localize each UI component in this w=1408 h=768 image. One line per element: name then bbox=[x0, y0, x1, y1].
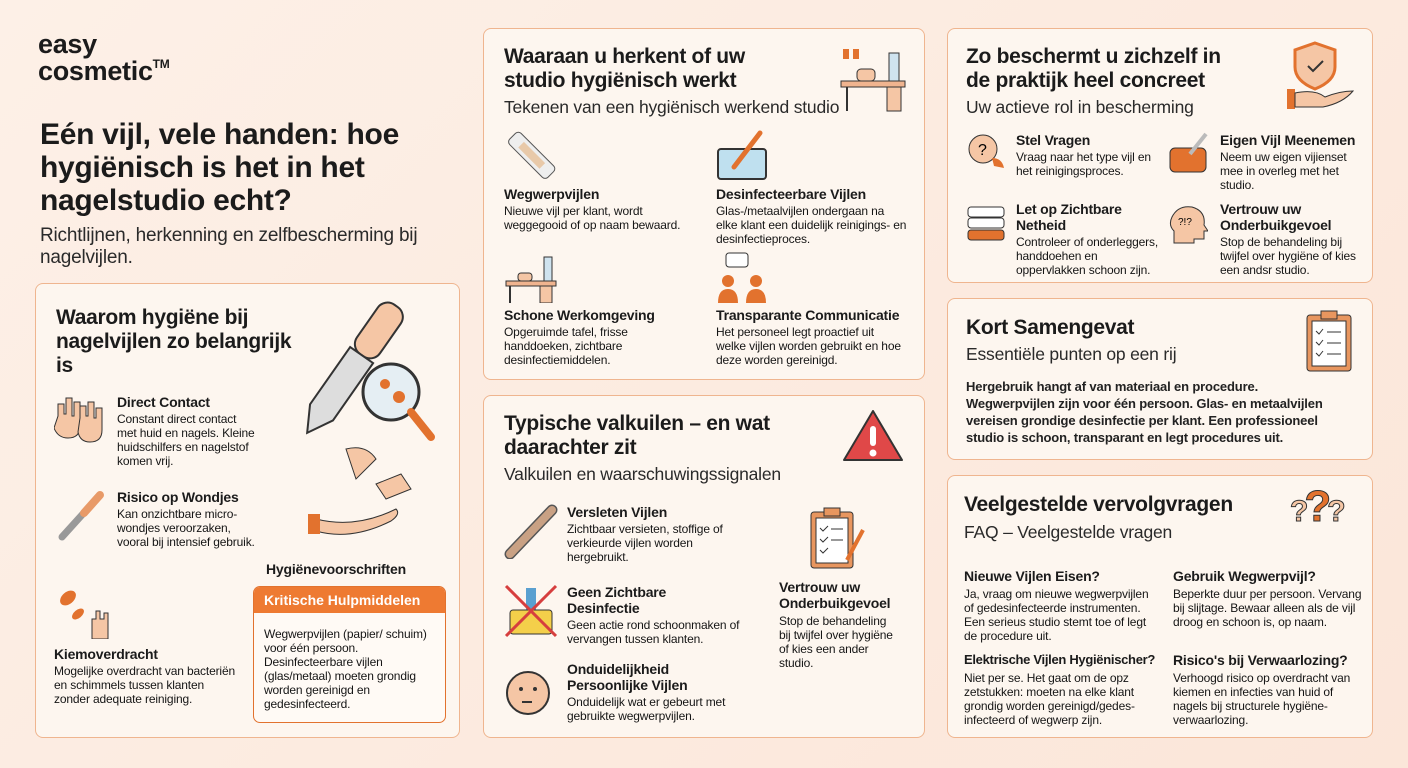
subheading: FAQ – Veelgestelde vragen bbox=[964, 522, 1172, 542]
item: direct contact bbox=[54, 394, 255, 468]
logo bbox=[38, 29, 169, 86]
panel: valkuilen bbox=[483, 395, 925, 738]
faq: gebruik wegwerpvijl: Beperkte duur per persoon. Vervang bij slijtage. Bewaar alleen als de vijl droog en schoon is, op naam. bbox=[1173, 587, 1361, 629]
item: vertrouw onderbuikgevoel: ?!? bbox=[1178, 217, 1192, 228]
faq: elektrische vijlen bbox=[964, 652, 1155, 727]
heading: hygienevoorschriften: Hygiënevoorschriften bbox=[266, 561, 406, 577]
item: desinfecteerbare vijlen: Glas-/metaalvijlen ondergaan na elke klant een duidelijk reinigings- en desinfectieproces. bbox=[716, 204, 906, 246]
logo: cosmeticTM bbox=[38, 56, 169, 86]
icon: desk bbox=[840, 49, 906, 112]
item: stel vragen: ? bbox=[978, 142, 987, 159]
item: vertrouw onderbuikgevoel bbox=[1170, 201, 1356, 277]
item: kiemoverdracht bbox=[54, 590, 235, 706]
icon: warning bbox=[843, 410, 903, 461]
item: onduidelijkheid: Onduidelijk wat er gebeurt met gebruikte wegwerpvijlen. bbox=[567, 695, 725, 723]
item: wegwerpvijlen: Nieuwe vijl per klant, wordt weggegooid of op naam bewaard. bbox=[504, 204, 680, 232]
item: desinfecteerbare vijlen bbox=[716, 130, 906, 246]
item: vertrouw onderbuikgevoel: Vertrouw uw Onderbuikgevoel bbox=[1220, 201, 1331, 233]
icon: shield hand bbox=[1287, 41, 1354, 109]
faq: nieuwe vijlen: Nieuwe Vijlen Eisen? bbox=[964, 568, 1100, 584]
icon: clipboard bbox=[1306, 310, 1352, 372]
item: let op zichtbare netheid: Let op Zichtbare Netheid bbox=[1016, 201, 1122, 233]
faq: elektrische vijlen: Niet per se. Het gaat om de opz zetstukken: moeten na elke klant grondig worden gereinigd/gedes-infecteerd of wegwerp zijn. bbox=[964, 671, 1135, 727]
item: vertrouw onderbuikgevoel: Stop de behandeling bij twijfel over hygiëne of kies een ander studio. bbox=[779, 614, 893, 670]
heading: Zo beschermt u zichzelf in de praktijk heel concreet bbox=[966, 45, 1221, 92]
item: versleten vijlen: Zichtbaar versieten, stoffige of verkieurde vijlen worden hergebruikt. bbox=[567, 522, 723, 564]
logo: easy bbox=[38, 29, 97, 59]
heading: Waarom hygiëne bij nagelvijlen zo belangrijk is bbox=[56, 306, 291, 377]
item: risico op wondjes: Kan onzichtbare micro-wondjes veroorzaken, vooral bij intensief gebruik. bbox=[117, 507, 255, 549]
icon: hands dust bbox=[308, 447, 412, 535]
panel: herkennen bbox=[483, 28, 925, 380]
faq: risico's: Verhoogd risico op overdracht van kiemen en infecties van huid of nagels bij structurele hygiëne-verwaarlozing. bbox=[1173, 671, 1350, 727]
item: schone werkomgeving: Schone Werkomgeving bbox=[504, 307, 655, 323]
panel: zelfbescherming bbox=[947, 28, 1373, 283]
item: transparante communicatie: Het personeel legt proactief uit welke vijlen worden gebruikt en hoe deze worden gereinigd. bbox=[716, 325, 901, 367]
item: stel vragen: Vraag naar het type vijl en het reinigingsproces. bbox=[1016, 150, 1151, 178]
item: kiemoverdracht: Kiemoverdracht bbox=[54, 646, 158, 662]
callout: kritische hulpmiddelen: Kritische Hulpmiddelen bbox=[264, 592, 420, 608]
subheading: Valkuilen en waarschuwingssignalen bbox=[504, 464, 781, 484]
heading: Typische valkuilen – en wat daarachter zit bbox=[504, 412, 770, 459]
item: transparante communicatie bbox=[716, 252, 901, 367]
icon: question marks: ??? bbox=[1290, 482, 1342, 531]
subheading: Tekenen van een hygiënisch werkend studio bbox=[504, 97, 839, 117]
item: wegwerpvijlen bbox=[504, 132, 680, 232]
item: risico op wondjes: Risico op Wondjes bbox=[117, 489, 239, 505]
item: schone werkomgeving bbox=[504, 256, 655, 367]
item: geen zichtbare desinfectie: Geen actie rond schoonmaken of vervangen tussen klanten. bbox=[567, 618, 739, 646]
item: transparante communicatie: Transparante Communicatie bbox=[716, 307, 899, 323]
heading: Kort Samengevat bbox=[966, 316, 1134, 339]
callout: kritische hulpmiddelen bbox=[253, 586, 446, 723]
item: versleten vijlen: Versleten Vijlen bbox=[567, 504, 667, 520]
item: kiemoverdracht: Mogelijke overdracht van bacteriën en schimmels tussen klanten zonder adequate reiniging. bbox=[54, 664, 235, 706]
item: eigen vijl meenemen: Eigen Vijl Meenemen bbox=[1220, 132, 1355, 148]
item: onduidelijkheid bbox=[506, 661, 726, 723]
faq: gebruik wegwerpvijl bbox=[1173, 568, 1361, 629]
faq: nieuwe vijlen: Ja, vraag om nieuwe wegwerpvijlen of gedesinfecteerde instrumenten. Een serieus studio stemt toe of legt de procedure uit. bbox=[964, 587, 1148, 643]
item: wegwerpvijlen: Wegwerpvijlen bbox=[504, 186, 599, 202]
faq: elektrische vijlen: Elektrische Vijlen Hygiënischer? bbox=[964, 652, 1155, 667]
item: eigen vijl meenemen bbox=[1170, 132, 1355, 192]
subheading: Uw actieve rol in bescherming bbox=[966, 97, 1194, 117]
item: let op zichtbare netheid: Controleer of onderleggers, handdoehen en oppervlakken schoon zijn. bbox=[1016, 235, 1158, 277]
title: Eén vijl, vele handen: hoe hygiënisch is het in het nagelstudio echt? bbox=[40, 118, 399, 217]
faq: risico's: Risico's bij Verwaarlozing? bbox=[1173, 652, 1348, 668]
item: stel vragen: Stel Vragen bbox=[1016, 132, 1090, 148]
panel: kort samengevat bbox=[947, 298, 1373, 460]
text block: summary: Hergebruik hangt af van materiaal en procedure. Wegwerpvijlen zijn voor één persoon. Glas- en metaalvijlen vereisen grondige desinfectie per klant. Een professioneel studio is schoon, transparant en legt procedures uit. bbox=[966, 379, 1323, 445]
callout: kritische hulpmiddelen: Wegwerpvijlen (papier/ schuim) voor één persoon. Desinfecteerbare vijlen (glas/metaal) moeten grondig worden gereinigd en gedesinfecteerd. bbox=[264, 627, 427, 711]
panel: FAQ bbox=[947, 475, 1373, 738]
faq: gebruik wegwerpvijl: Gebruik Wegwerpvijl? bbox=[1173, 568, 1316, 584]
item: vertrouw onderbuikgevoel bbox=[779, 508, 893, 670]
subtitle: Richtlijnen, herkenning en zelfbescherming bij nagelvijlen. bbox=[40, 225, 417, 268]
item: geen zichtbare desinfectie bbox=[505, 584, 740, 646]
item: versleten vijlen bbox=[504, 504, 723, 564]
subheading: Essentiële punten op een rij bbox=[966, 344, 1176, 364]
heading: Veelgestelde vervolgvragen bbox=[964, 493, 1233, 516]
item: vertrouw onderbuikgevoel: Vertrouw uw Onderbuikgevoel bbox=[779, 579, 890, 611]
icon: nail file and magnifier bbox=[306, 302, 435, 441]
item: eigen vijl meenemen: Neem uw eigen vijienset mee in overleg met het studio. bbox=[1220, 150, 1347, 192]
item: desinfecteerbare vijlen: Desinfecteerbare Vijlen bbox=[716, 186, 866, 202]
item: direct contact: Direct Contact bbox=[117, 394, 210, 410]
item: risico op wondjes bbox=[58, 489, 255, 549]
heading: Waaraan u herkent of uw studio hygiënisch werkt bbox=[504, 45, 745, 92]
item: geen zichtbare desinfectie: Geen Zichtbare Desinfectie bbox=[567, 584, 666, 616]
item: schone werkomgeving: Opgeruimde tafel, frisse handdoeken, zichtbare desinfectiemiddelen. bbox=[504, 325, 628, 367]
item: vertrouw onderbuikgevoel: Stop de behandeling bij twijfel over hygiëne of kies een andsr studio. bbox=[1220, 235, 1356, 277]
panel: waarom hygiene bbox=[35, 283, 460, 738]
item: stel vragen bbox=[968, 132, 1151, 178]
item: let op zichtbare netheid bbox=[968, 201, 1158, 277]
item: onduidelijkheid: Onduidelijkheid Persoonlijke Vijlen bbox=[567, 661, 687, 693]
item: direct contact: Constant direct contact met huid en nagels. Kleine huidschilfers en nagelstof komen vrij. bbox=[117, 412, 255, 468]
